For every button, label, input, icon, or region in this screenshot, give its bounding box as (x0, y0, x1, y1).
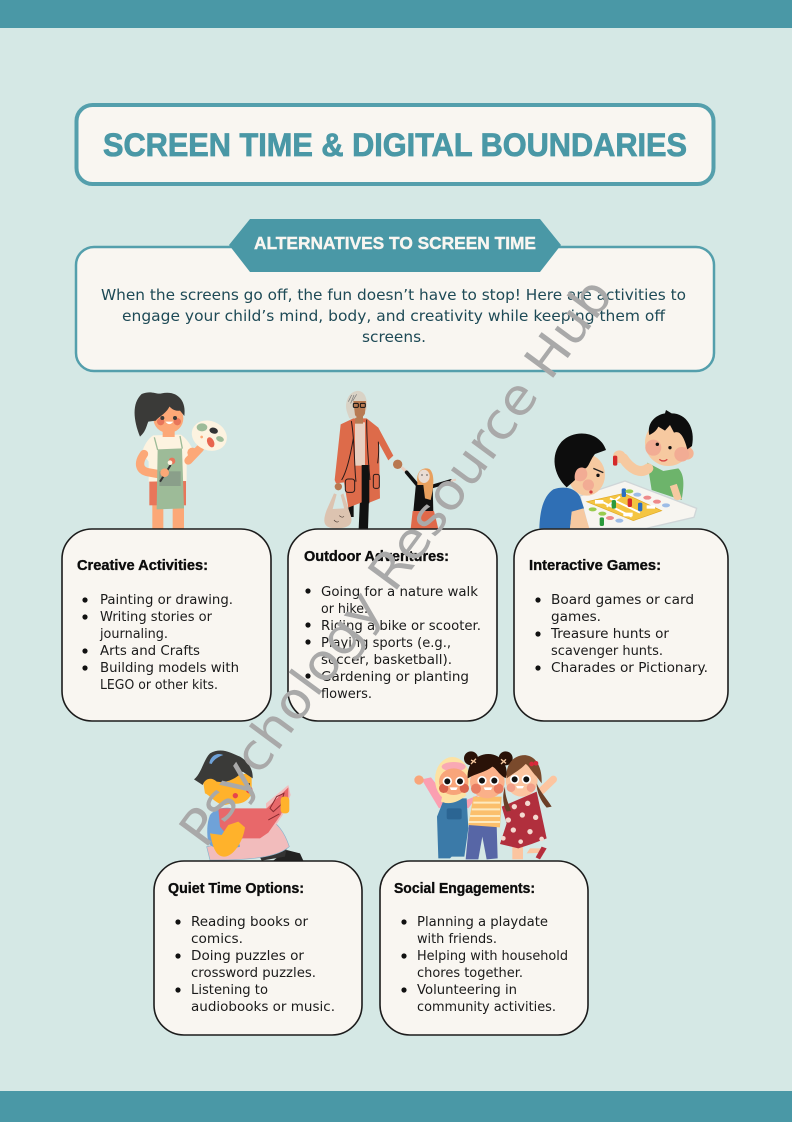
list: social engagements: Helping with household (417, 949, 568, 964)
list: creative activities: Writing stories or (100, 610, 213, 625)
list: outdoor adventures: Playing sports (e.g., (321, 636, 451, 651)
list: outdoor adventures: Riding a bike or scooter. (321, 619, 481, 634)
list: outdoor adventures (305, 585, 481, 702)
icon: grandmother walking with child (324, 391, 456, 529)
section heading banner: ALTERNATIVES TO SCREEN TIME (254, 233, 536, 253)
card: social engagements (380, 861, 588, 1035)
top bar (0, 0, 792, 28)
list: creative activities: journaling. (99, 627, 168, 642)
list: creative activities: Building models with (100, 661, 239, 676)
list: social engagements (401, 915, 568, 1015)
icon: three children standing together (414, 751, 553, 859)
list: interactive games (535, 593, 708, 676)
list: quiet time options: audiobooks or music. (191, 1000, 335, 1015)
list: quiet time options: comics. (191, 932, 243, 947)
list: outdoor adventures: flowers. (321, 687, 372, 702)
card: interactive games (514, 529, 728, 721)
list: interactive games: Treasure hunts or (550, 627, 670, 642)
list: interactive games: games. (551, 610, 601, 625)
card: quiet time options: Quiet Time Options: (168, 881, 304, 897)
card: outdoor adventures: Outdoor Adventures: (304, 549, 449, 565)
card: creative activities: Creative Activities: (77, 558, 208, 574)
list: social engagements: chores together. (417, 966, 523, 981)
panel: introduction (76, 247, 714, 371)
list: quiet time options (175, 915, 335, 1015)
list: creative activities: LEGO or other kits. (100, 678, 218, 693)
list: quiet time options: Listening to (191, 983, 268, 998)
list: outdoor adventures: or hike. (321, 602, 368, 617)
list: creative activities: Painting or drawing. (100, 593, 233, 608)
card: interactive games: Interactive Games: (529, 558, 661, 574)
intro text: screens. (362, 328, 426, 346)
list: outdoor adventures: Gardening or planting (321, 670, 469, 685)
list: quiet time options: crossword puzzles. (191, 966, 316, 981)
watermark: Psychology Resource Hub (168, 267, 624, 857)
icon: child reading a book (194, 750, 303, 861)
bottom bar (0, 1091, 792, 1122)
list: outdoor adventures: Going for a nature walk (321, 585, 478, 600)
title block (76, 105, 714, 184)
icon: child painting (135, 392, 232, 529)
list: quiet time options: Doing puzzles or (191, 949, 305, 964)
list: outdoor adventures: soccer, basketball). (321, 653, 452, 668)
card: creative activities (62, 529, 271, 721)
list: interactive games: scavenger hunts. (551, 644, 663, 659)
list: social engagements: Volunteering in (417, 983, 517, 998)
card: quiet time options (154, 861, 362, 1035)
list: social engagements: with friends. (417, 932, 497, 947)
intro text: engage your child’s mind, body, and creativity while keeping them off (122, 307, 665, 325)
list: quiet time options: Reading books or (191, 915, 309, 930)
list: social engagements: Planning a playdate (417, 915, 548, 930)
intro text (101, 286, 686, 346)
card: outdoor adventures (288, 529, 497, 721)
list: interactive games: Board games or card (551, 593, 694, 608)
icon: children playing a board game (539, 410, 697, 528)
list: creative activities (82, 593, 239, 693)
list: interactive games: Charades or Pictionary. (551, 661, 708, 676)
card: social engagements: Social Engagements: (394, 881, 535, 897)
title block: SCREEN TIME & DIGITAL BOUNDARIES (103, 127, 687, 163)
list: social engagements: community activities. (417, 1000, 556, 1015)
section heading banner (229, 219, 561, 272)
list: creative activities: Arts and Crafts (100, 644, 200, 659)
intro text: When the screens go off, the fun doesn’t have to stop! Here are activities to (101, 286, 686, 304)
